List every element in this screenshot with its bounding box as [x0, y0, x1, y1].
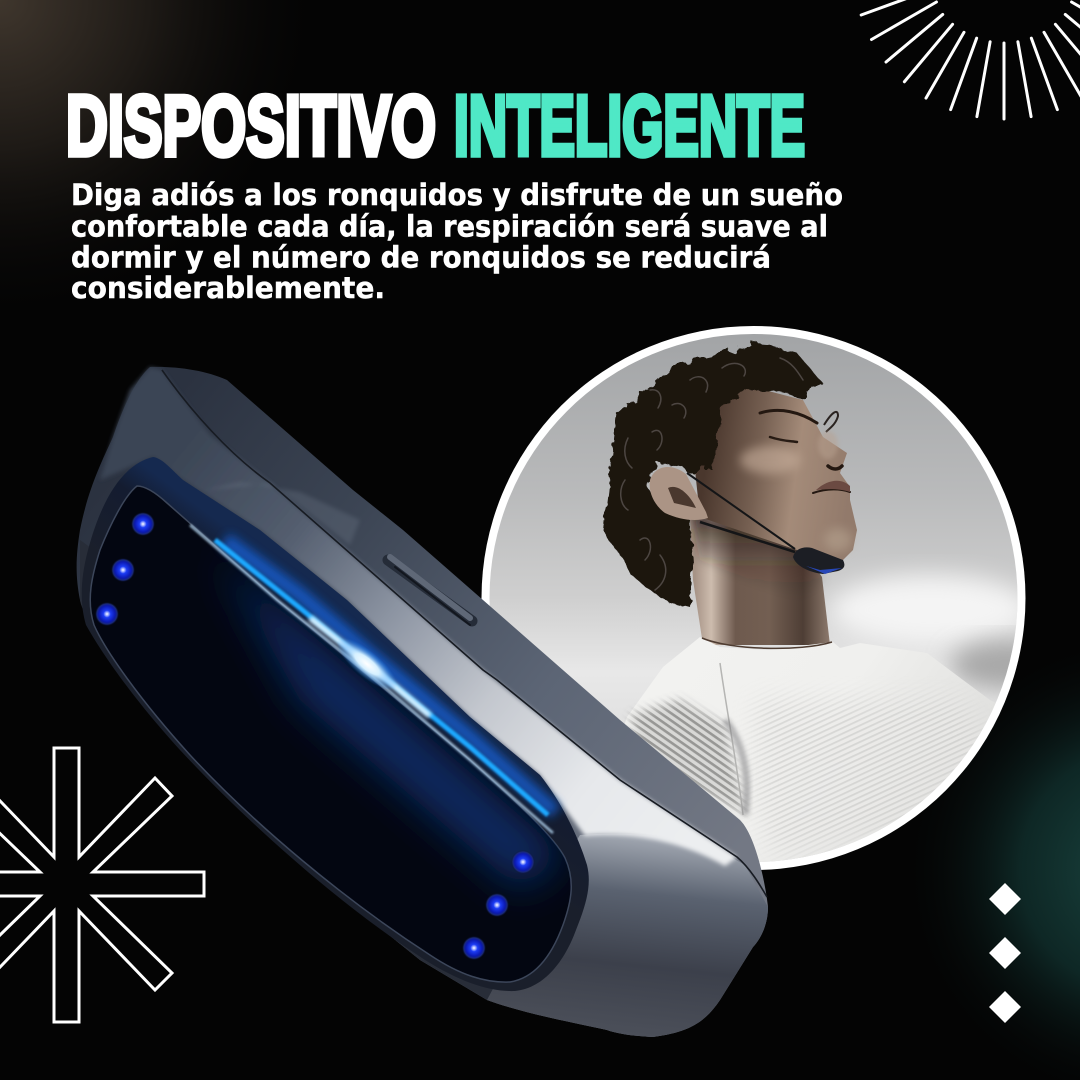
icon: three white diamonds	[989, 883, 1021, 1023]
sweater	[625, 637, 994, 862]
description text: confortable cada día, la respiración será suave al	[71, 210, 828, 244]
screen bezel	[82, 457, 589, 991]
face	[695, 385, 857, 570]
backdrop light and shade	[830, 575, 1070, 690]
description text: Diga adiós a los ronquidos y disfrute de un sueño	[71, 178, 843, 212]
ear	[650, 467, 708, 520]
title: INTELIGENTE	[454, 79, 805, 174]
lower edge dark	[80, 540, 580, 1014]
hair	[603, 341, 838, 607]
chin strap device	[687, 473, 844, 574]
product device	[77, 367, 768, 1037]
reflection edge on top face	[205, 482, 360, 545]
icon: sunburst top right	[861, 0, 1080, 119]
screen	[90, 486, 571, 982]
bright metal band	[100, 367, 737, 866]
blue leds	[95, 512, 535, 960]
blue light streak	[190, 525, 555, 833]
seam line	[162, 370, 767, 897]
icon: outlined asterisk star	[0, 748, 204, 1022]
title: DISPOSITIVO	[66, 79, 436, 174]
panel: portrait circle	[482, 326, 1026, 870]
button	[388, 557, 472, 625]
eye, brow, nose and mouth	[760, 410, 850, 493]
device body	[77, 367, 768, 1037]
description text: considerablemente.	[71, 271, 385, 305]
neck	[690, 510, 830, 645]
description text: dormir y el número de ronquidos se reducirá	[71, 240, 771, 274]
description text	[71, 178, 843, 305]
device right end	[487, 834, 768, 1037]
